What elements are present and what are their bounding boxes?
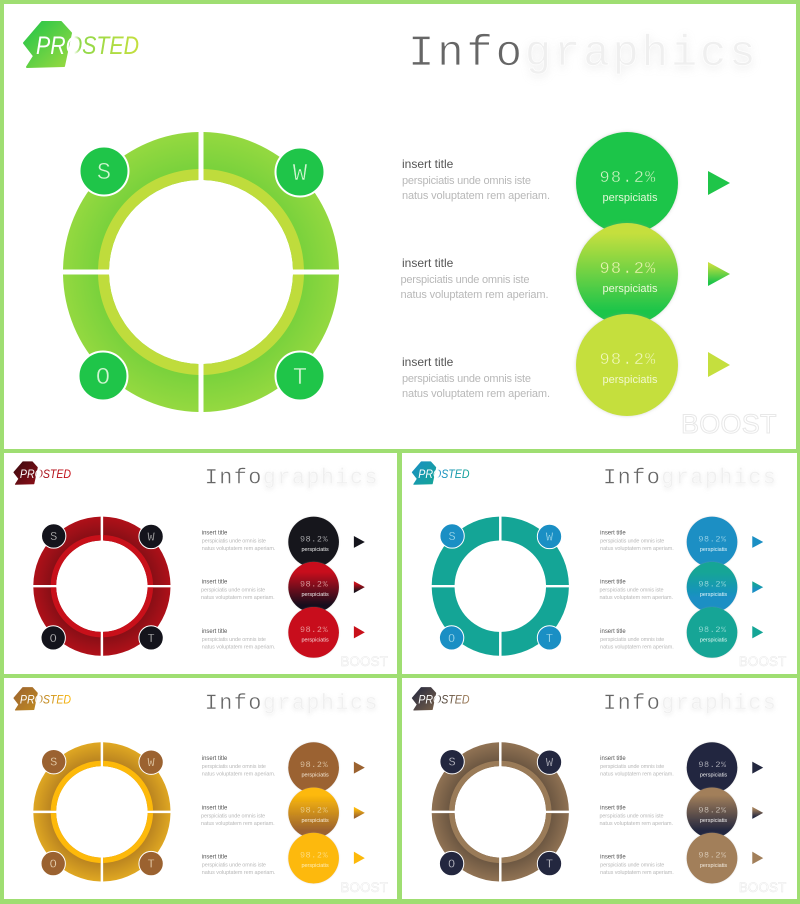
text block 3: perspiciatis unde omnis iste [402, 373, 531, 385]
logo: PROSTED [418, 693, 470, 707]
text block 2: perspiciatis unde omnis iste [599, 588, 664, 594]
logo [24, 22, 139, 67]
stat circle 3: perspiciatis [301, 637, 329, 643]
stat circle 2: perspiciatis [301, 818, 329, 824]
text block 3 [600, 629, 674, 650]
text block 1: natus voluptatem rem aperiam. [600, 546, 674, 552]
badge: S: S [50, 530, 57, 544]
stat circle 3 [288, 833, 339, 883]
stat circle 3: 98.2% [599, 351, 657, 370]
stat circle 2: 98.2% [698, 805, 727, 815]
text block 1: insert title [202, 530, 228, 536]
stat circle 3: perspiciatis [301, 863, 329, 869]
arrow 2 [752, 807, 763, 819]
badge: W: W [293, 161, 308, 188]
title: graphics [263, 691, 379, 716]
text block 1 [600, 756, 674, 778]
stat circle 3: perspiciatis [700, 637, 727, 643]
title [205, 465, 379, 490]
text block 2 [201, 805, 275, 827]
watermark: BOOST [739, 654, 787, 669]
stat circle 2 [687, 562, 737, 613]
text block 2: insert title [600, 580, 626, 586]
badge: O [41, 851, 65, 876]
text block 2: insert title [202, 580, 228, 586]
title: Info [408, 29, 525, 79]
stat circle 3: perspiciatis [700, 863, 727, 869]
badge: O: O [50, 632, 57, 646]
text block 3: insert title [202, 855, 228, 861]
stat circle 2: perspiciatis [602, 283, 658, 295]
text block 2 [599, 580, 673, 601]
text block 2: perspiciatis unde omnis iste [201, 588, 265, 594]
panel: red SWOT slide [14, 462, 388, 669]
stat circle 3 [687, 833, 737, 883]
arrow 1 [752, 536, 763, 548]
stat circle 1 [687, 517, 737, 567]
stat circle 2: perspiciatis [700, 818, 727, 824]
arrow 2 [354, 807, 365, 819]
arrow 3 [752, 852, 763, 864]
text block 1: insert title [600, 530, 626, 536]
SWOT ring [432, 742, 569, 881]
stat circle 1: 98.2% [599, 169, 657, 188]
SWOT ring [432, 517, 569, 656]
title [603, 465, 777, 490]
panel: brown SWOT slide [412, 688, 787, 895]
stat circle 3: 98.2% [698, 851, 727, 861]
badge: O [439, 626, 464, 650]
stat circle 1: 98.2% [300, 534, 329, 544]
stat circle 3 [288, 607, 339, 658]
text block 2: insert title [402, 256, 454, 270]
text block 1: natus voluptatem rem aperiam. [202, 546, 276, 552]
watermark: BOOST [681, 409, 777, 439]
arrow 3 [708, 352, 730, 377]
stat circle 1 [687, 742, 737, 793]
text block 3: insert title [600, 855, 626, 861]
stat circle 2 [687, 788, 737, 838]
text block 3: perspiciatis unde omnis iste [600, 637, 664, 643]
logo: PROSTED [36, 32, 139, 60]
text block 2: natus voluptatem rem aperiam. [201, 821, 275, 827]
stat circle 1: perspiciatis [602, 192, 658, 204]
text block 1: insert title [402, 157, 454, 171]
text block 1: natus voluptatem rem aperiam. [202, 772, 276, 778]
stat circle 2: 98.2% [300, 805, 329, 815]
text block 3: perspiciatis unde omnis iste [202, 637, 266, 643]
text block 2: natus voluptatem rem aperiam. [400, 289, 548, 301]
text block 2: insert title [202, 805, 228, 811]
stat circle 2 [576, 223, 678, 325]
badge: O: O [448, 632, 455, 646]
badge: O: O [50, 858, 57, 872]
badge: T [139, 851, 163, 876]
logo [14, 688, 71, 710]
stat circle 3: 98.2% [300, 625, 329, 635]
watermark: BOOST [340, 880, 388, 895]
text block 1: perspiciatis unde omnis iste [600, 538, 664, 544]
text block 1: perspiciatis unde omnis iste [600, 764, 664, 770]
stat circle 2: 98.2% [599, 260, 657, 279]
badge: T: T [148, 632, 155, 646]
stat circle 2: 98.2% [698, 580, 727, 590]
stat circle 2 [288, 788, 339, 838]
stat circle 1 [288, 742, 339, 793]
title [205, 691, 379, 716]
text block 1: natus voluptatem rem aperiam. [402, 190, 550, 202]
text block 2: perspiciatis unde omnis iste [599, 813, 664, 819]
badge: S: S [449, 756, 456, 770]
badge: T: T [546, 632, 553, 646]
badge: O [78, 352, 128, 400]
stat circle 1: perspiciatis [700, 547, 727, 553]
text block 2: insert title [600, 805, 626, 811]
badge: T [537, 626, 562, 650]
stat circle 1: perspiciatis [301, 547, 329, 553]
text block 1 [600, 530, 674, 552]
badge: W: W [546, 756, 554, 770]
text block 2: natus voluptatem rem aperiam. [201, 595, 275, 601]
badge: T [276, 352, 324, 400]
title [603, 691, 777, 716]
badge: W [276, 148, 324, 196]
arrow 1 [752, 762, 763, 774]
arrow 2 [752, 581, 763, 593]
arrow 2 [708, 262, 730, 286]
text block 1: perspiciatis unde omnis iste [202, 764, 266, 770]
text block 3: perspiciatis unde omnis iste [600, 863, 664, 869]
stat circle 3: 98.2% [300, 851, 329, 861]
arrow 1 [354, 536, 365, 548]
badge: W [139, 750, 163, 774]
SWOT ring [33, 742, 170, 881]
text block 1 [402, 157, 550, 202]
panel: gold SWOT slide [14, 688, 388, 895]
badge: S: S [50, 756, 57, 770]
text block 3: natus voluptatem rem aperiam. [202, 870, 276, 876]
badge: W: W [546, 530, 554, 544]
stat circle 3 [687, 607, 737, 658]
badge: T [537, 851, 562, 876]
stat circle 1 [288, 517, 339, 567]
title: Info [205, 465, 263, 490]
badge: W [537, 524, 562, 549]
badge: O [439, 851, 464, 876]
badge: O: O [448, 858, 455, 872]
title: Info [603, 691, 661, 716]
text block 1 [202, 756, 276, 778]
text block 2: perspiciatis unde omnis iste [400, 274, 530, 286]
text block 3: natus voluptatem rem aperiam. [202, 644, 276, 650]
text block 1 [202, 530, 276, 552]
SWOT ring [33, 517, 170, 656]
title: graphics [263, 465, 379, 490]
title: Info [205, 691, 263, 716]
stat circle 3 [576, 314, 678, 416]
text block 3 [202, 855, 276, 876]
badge: S [440, 524, 464, 548]
text block 3: insert title [402, 355, 454, 369]
text block 3: natus voluptatem rem aperiam. [600, 644, 674, 650]
text block 3: insert title [600, 629, 626, 635]
badge: T [139, 626, 163, 650]
badge: O: O [96, 365, 110, 392]
arrow 1 [708, 171, 730, 195]
text block 2: natus voluptatem rem aperiam. [599, 595, 673, 601]
text block 3 [202, 629, 276, 650]
stat circle 1: 98.2% [300, 760, 329, 770]
watermark: BOOST [739, 880, 787, 895]
badge: S [42, 524, 66, 548]
text block 3: insert title [202, 629, 228, 635]
arrow 1 [354, 762, 365, 774]
text block 2 [201, 580, 275, 601]
title: Info [603, 465, 661, 490]
text block 3: natus voluptatem rem aperiam. [600, 870, 674, 876]
stat circle 3: perspiciatis [602, 374, 658, 386]
badge: W [537, 750, 562, 774]
logo: PROSTED [20, 467, 71, 481]
text block 3: perspiciatis unde omnis iste [202, 863, 266, 869]
stat circle 1: 98.2% [698, 534, 727, 544]
text block 2 [400, 256, 548, 301]
title: graphics [661, 691, 777, 716]
badge: T: T [148, 858, 155, 872]
text block 1: insert title [202, 756, 228, 762]
logo: PROSTED [418, 467, 470, 481]
text block 3 [402, 355, 550, 400]
arrow 3 [354, 852, 365, 864]
logo [412, 688, 470, 710]
text block 1: perspiciatis unde omnis iste [402, 175, 531, 187]
stat circle 2: perspiciatis [700, 592, 727, 598]
stat circle 2: perspiciatis [301, 592, 329, 598]
title: graphics [661, 465, 777, 490]
text block 2: perspiciatis unde omnis iste [201, 813, 265, 819]
arrow 2 [354, 581, 365, 593]
watermark: BOOST [340, 654, 388, 669]
logo: PROSTED [20, 693, 71, 707]
stat circle 1: perspiciatis [301, 773, 329, 779]
badge: S [42, 750, 66, 774]
stat circle 1: perspiciatis [700, 773, 727, 779]
text block 2 [599, 805, 673, 827]
text block 3 [600, 855, 674, 876]
stat circle 2: 98.2% [300, 580, 329, 590]
SWOT ring [63, 132, 339, 412]
text block 1: insert title [600, 756, 626, 762]
text block 1: natus voluptatem rem aperiam. [600, 772, 674, 778]
stat circle 2 [288, 562, 339, 613]
title [408, 29, 758, 79]
stat circle 1 [576, 132, 678, 234]
badge: W [139, 524, 163, 549]
badge: O [41, 626, 65, 650]
arrow 3 [752, 626, 763, 638]
logo [14, 462, 71, 484]
stat circle 1: 98.2% [698, 760, 727, 770]
badge: W: W [148, 530, 156, 544]
arrow 3 [354, 626, 365, 638]
stat circle 3: 98.2% [698, 625, 727, 635]
badge: S [440, 750, 464, 774]
logo [412, 462, 470, 484]
panel: green SWOT slide [4, 4, 796, 449]
badge: T: T [293, 365, 307, 392]
badge: T: T [546, 858, 553, 872]
badge: S: S [449, 530, 456, 544]
badge: S: S [97, 160, 111, 187]
badge: S [80, 146, 128, 196]
text block 2: natus voluptatem rem aperiam. [599, 821, 673, 827]
text block 3: natus voluptatem rem aperiam. [402, 388, 550, 400]
badge: W: W [148, 756, 156, 770]
panel: teal SWOT slide [412, 462, 787, 669]
title: graphics [525, 29, 758, 79]
text block 1: perspiciatis unde omnis iste [202, 538, 266, 544]
